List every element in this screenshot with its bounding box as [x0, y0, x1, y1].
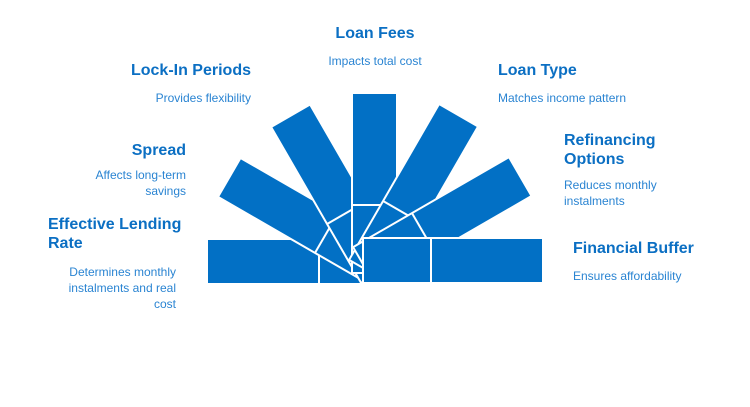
label: lock-in: Lock-In Periods: [131, 62, 251, 79]
label: financial buffer: Financial Buffer: [573, 240, 694, 257]
sub: loan fees: Impacts total cost: [328, 54, 422, 68]
bar: loan fees: [352, 93, 397, 273]
bar: loan type: [349, 104, 478, 282]
sub: lock-in: Provides flexibility: [156, 91, 251, 105]
sub: loan type: Matches income pattern: [498, 91, 626, 105]
label: refinancing: Options: [564, 151, 624, 168]
bar: refinancing: [353, 157, 531, 286]
sub: effective lending rate: [69, 265, 176, 311]
sub: spread: savings: [145, 184, 186, 198]
label: refinancing: Refinancing: [564, 132, 656, 149]
bar: financial buffer: [363, 238, 543, 283]
bar: spread: [218, 158, 396, 287]
sub: refinancing: instalments: [564, 194, 625, 208]
label: effective lending rate: Effective Lending: [48, 216, 181, 233]
sub: effective lending rate: instalments and real: [69, 281, 176, 295]
sub: spread: [96, 168, 186, 198]
label: effective lending rate: [48, 216, 181, 252]
sub: refinancing: Reduces monthly: [564, 178, 657, 192]
label: loan fees: Loan Fees: [335, 25, 415, 42]
sub: refinancing: [564, 178, 657, 208]
sub: spread: Affects long-term: [96, 168, 186, 182]
bar: effective lending rate: [207, 239, 387, 284]
label: spread: Spread: [132, 142, 186, 159]
sub: financial buffer: Ensures affordability: [573, 269, 682, 283]
sub: effective lending rate: Determines monthly: [69, 265, 176, 279]
label: effective lending rate: Rate: [48, 235, 83, 252]
bar: lock-in: [271, 105, 400, 283]
label: refinancing: [564, 132, 656, 168]
sub: effective lending rate: cost: [154, 297, 176, 311]
label: loan type: Loan Type: [498, 62, 577, 79]
